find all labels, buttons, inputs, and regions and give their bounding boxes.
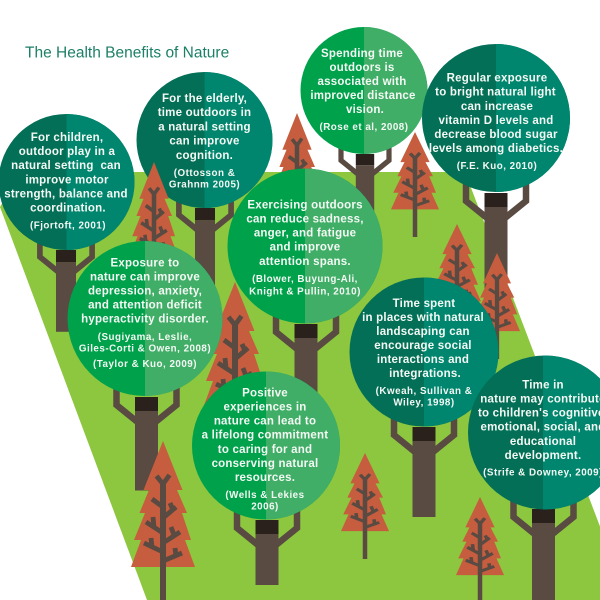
text: decrease blood sugar (434, 129, 558, 141)
panel: vitamin D (422, 44, 570, 192)
text: a natural setting (158, 122, 251, 134)
text: development. (505, 450, 581, 462)
text: (Wells & Lekies (225, 490, 305, 501)
circle (68, 241, 223, 396)
text: anger, and fatigue (254, 228, 356, 240)
text: (Ottosson & (174, 168, 235, 179)
text: can improve (169, 136, 240, 148)
text: educational (510, 436, 576, 448)
text: associated with (318, 76, 406, 88)
text: natural setting can (11, 160, 121, 172)
tree: trunk behind Fjortoft circle (40, 241, 92, 332)
text: landscaping can (376, 326, 470, 338)
text: improved distance (310, 90, 416, 102)
text: experiences in (224, 402, 306, 414)
title: The Health Benefits of Nature (25, 44, 229, 62)
circle (300, 27, 428, 154)
circle (0, 114, 134, 250)
text: For children, (31, 132, 103, 144)
text: (F.E. Kuo, 2010) (457, 161, 537, 172)
text: Time in (522, 380, 564, 392)
text: conserving natural (212, 458, 318, 470)
text: (Kweah, Sullivan & (376, 386, 472, 397)
panel: elderly cognition (136, 72, 272, 208)
text: 2006) (251, 502, 279, 512)
text: (Strife & Downey, 2009) (483, 468, 600, 478)
tree: trunk behind exposure circle (116, 387, 176, 490)
pine: lower left large (131, 441, 195, 600)
text: a lifelong commitment (202, 430, 328, 442)
panel: social interactions (350, 278, 498, 426)
pine: centre right (433, 224, 481, 329)
circle (136, 72, 272, 208)
text: can increase (461, 101, 533, 113)
text: Regular exposure (447, 72, 547, 84)
green lawn ground (0, 172, 600, 600)
text: strength, balance and (4, 188, 128, 200)
text: and attention deficit (88, 300, 202, 312)
text: Positive (242, 388, 288, 400)
text: (Rose et al, 2008) (319, 122, 409, 133)
panel: positive experiences (192, 372, 340, 520)
text: vision. (346, 104, 384, 116)
pine: behind exercising circle (273, 113, 321, 241)
panel: children motor strength (0, 114, 134, 250)
pine: lower right (456, 497, 504, 600)
pine: lower centre (341, 453, 389, 559)
text: in places with natural (362, 312, 484, 324)
tree: trunk behind cognitive circle (514, 499, 574, 600)
text: to bright natural light (435, 86, 556, 98)
text: nature can lead to (214, 416, 316, 428)
text: and improve (270, 242, 340, 254)
circle (422, 44, 570, 192)
panel: distance vision (300, 27, 428, 154)
text: hyperactivity disorder. (81, 314, 209, 326)
text: (Taylor & Kuo, 2009) (93, 359, 197, 370)
text: outdoor play in a (19, 146, 116, 158)
tree: trunk behind positive experiences circle (237, 510, 297, 585)
text: nature can improve (90, 272, 200, 284)
text: outdoors is (329, 62, 395, 74)
text: depression, anxiety, (88, 286, 202, 298)
text: (Sugiyama, Leslie, (98, 332, 192, 343)
text: to caring for and (218, 444, 312, 456)
tree: trunk behind distance vision circle (341, 146, 389, 237)
text: coordination. (30, 202, 106, 214)
text: resources. (235, 472, 295, 484)
text: encourage social (374, 340, 472, 352)
circle (228, 168, 382, 324)
text: For the elderly, (162, 93, 247, 105)
text: Exposure to (111, 258, 179, 270)
text: attention spans. (259, 256, 351, 268)
circle (192, 372, 340, 520)
text: cognition. (176, 150, 233, 162)
tree: trunk behind vitamin D circle (466, 183, 526, 325)
text: Time spent (393, 298, 455, 310)
text: vitamin D levels and (439, 115, 553, 127)
text: Giles-Corti & Owen, 2008) (79, 344, 211, 354)
tree: trunk behind exercising circle (276, 314, 336, 398)
tree: trunk behind elderly circle (179, 199, 231, 295)
panel: children's development (468, 356, 600, 510)
pine: upper left, overlapping elderly circle (130, 162, 178, 290)
circle (468, 356, 600, 510)
pine: centre (203, 282, 267, 453)
text: Exercising outdoors (247, 200, 363, 212)
panel: exercising outdoors (228, 168, 382, 324)
text: Wiley, 1998) (393, 398, 455, 408)
text: can reduce sadness, (246, 214, 364, 226)
text: time outdoors in (158, 107, 251, 119)
text: interactions and (377, 354, 469, 366)
text: (Blower, Buyung-Ali, (252, 274, 358, 285)
text: improve motor (25, 174, 109, 186)
circle (350, 278, 498, 426)
text: Spending time (321, 48, 403, 60)
text: (Fjortoft, 2001) (30, 220, 106, 232)
text: levels among diabetics. (429, 143, 563, 155)
text: Grahnm 2005) (169, 180, 240, 190)
text: Knight & Pullin, 2010) (249, 286, 361, 298)
panel: exposure to nature (68, 241, 223, 396)
pine: upper right (391, 132, 439, 237)
pine: right edge (474, 253, 520, 359)
tree: trunk behind social circle (394, 417, 454, 517)
text: integrations. (389, 368, 461, 380)
